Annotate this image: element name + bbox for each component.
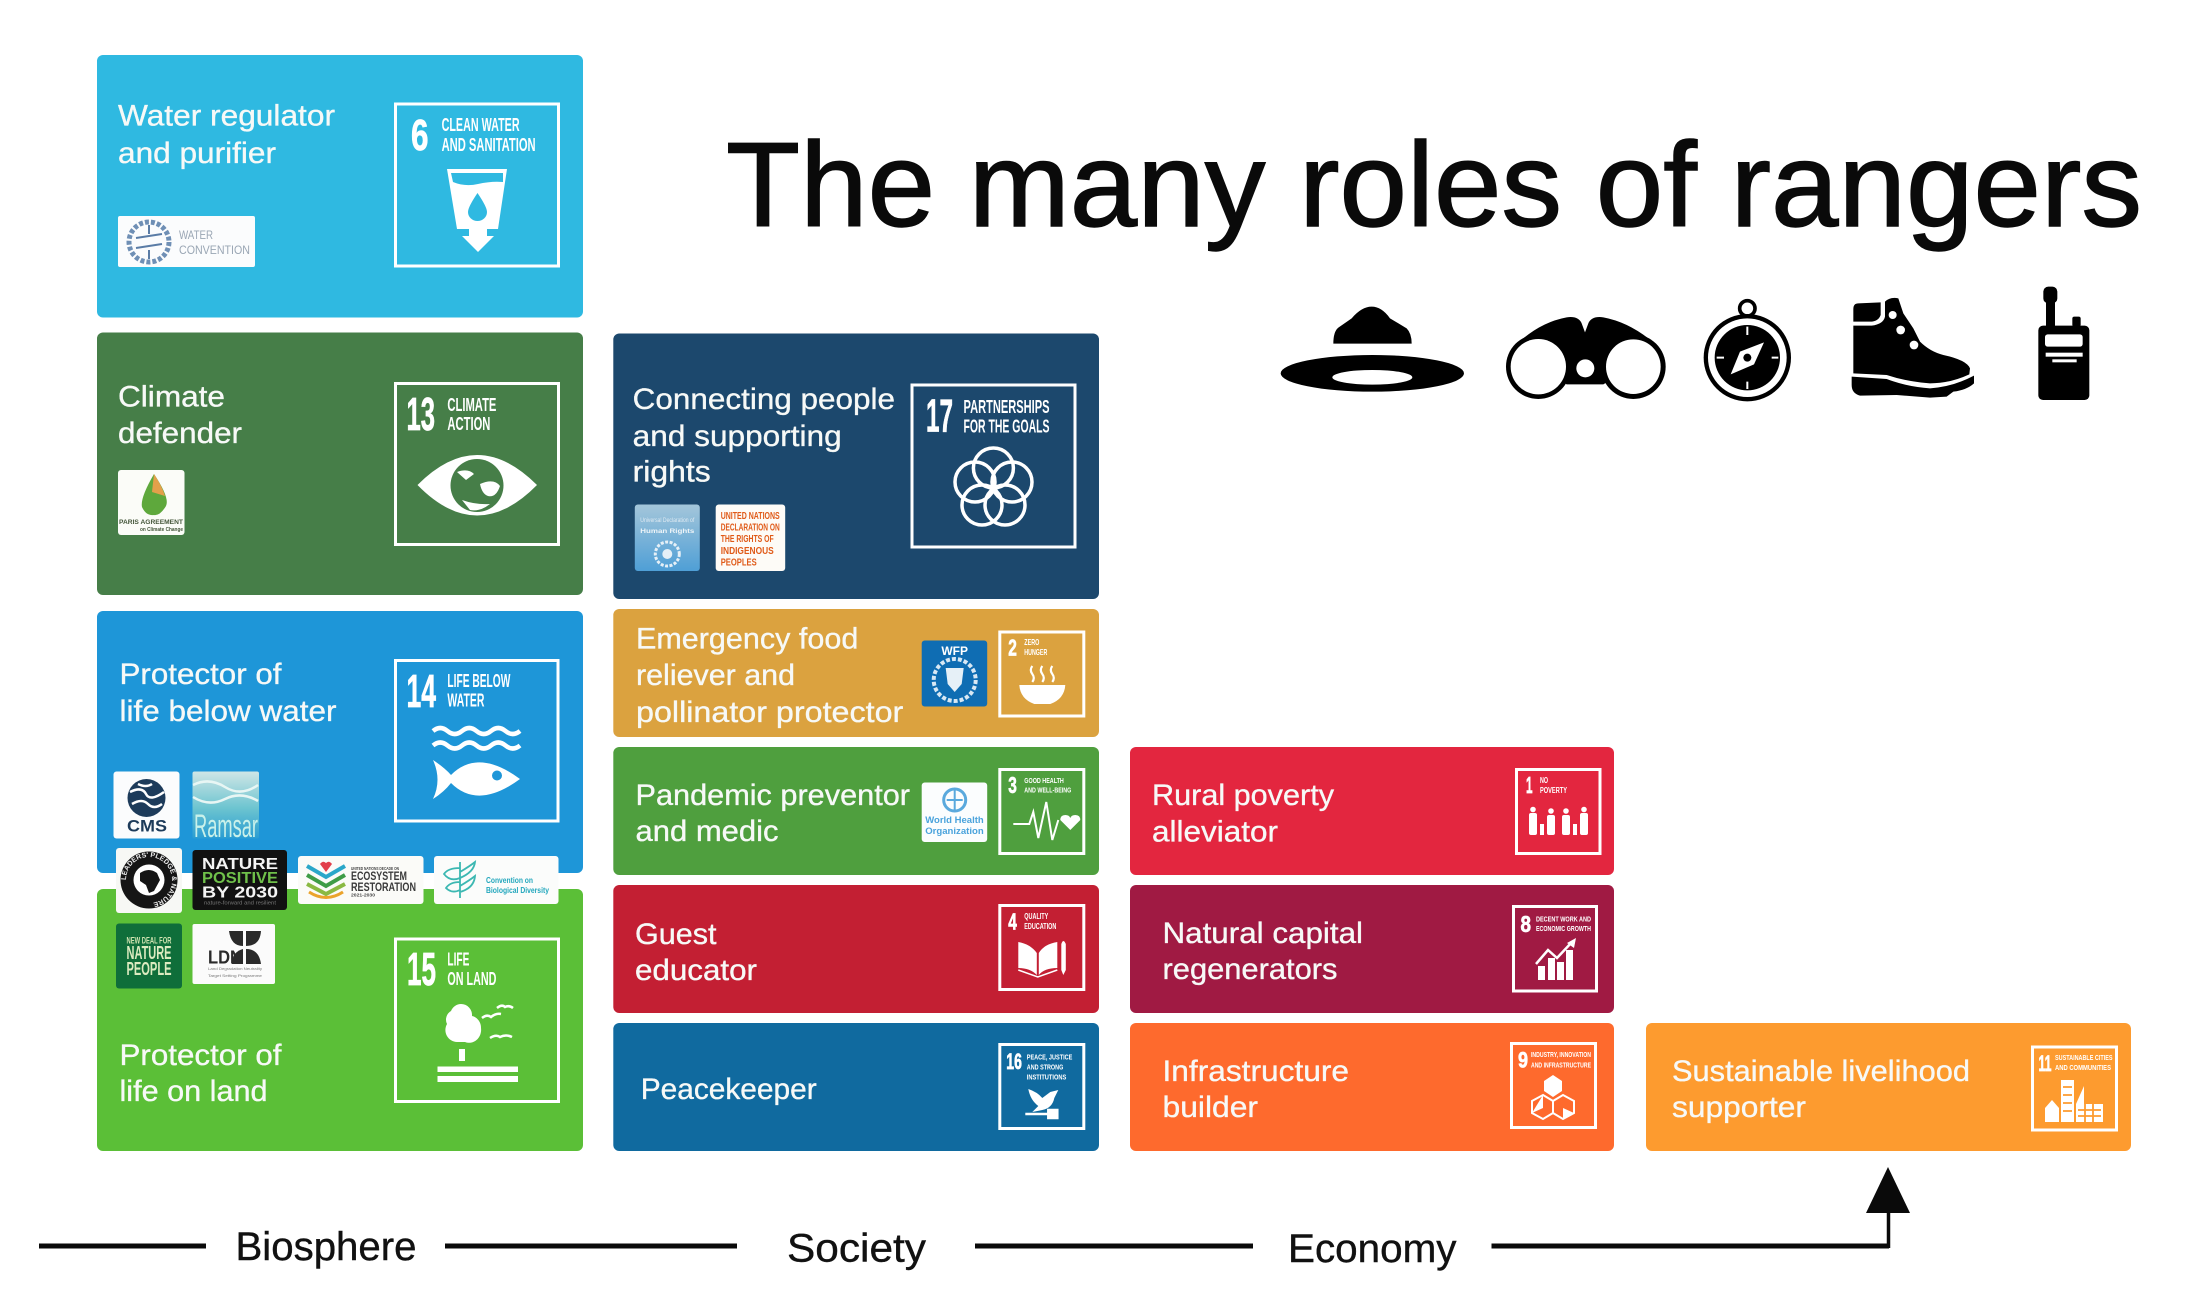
label: economy: Economy	[1288, 1227, 1456, 1271]
logo: ecosystem restoration: 2021-2030	[351, 892, 376, 898]
SDG 11 tile: AND COMMUNITIES	[2055, 1065, 2111, 1072]
role text: natural capital	[1162, 917, 1363, 986]
SDG 4 tile	[1000, 906, 1084, 990]
logo: universal declaration of human rights: Human Rights	[640, 528, 695, 535]
role text: pandemic preventor: and medic	[636, 815, 778, 848]
logo: water convention: CONVENTION	[179, 243, 250, 257]
role text: rural poverty	[1152, 779, 1334, 848]
SDG 3 tile	[1000, 770, 1084, 854]
SDG 14 tile: 14	[406, 665, 436, 717]
SDG 2 tile: HUNGER	[1024, 647, 1047, 657]
axis line segments	[39, 1244, 1889, 1248]
SDG 8 tile: 8	[1520, 911, 1531, 937]
SDG 15 tile: ON LAND	[447, 969, 496, 989]
panel: climate defender	[97, 332, 583, 595]
progression axis with arrow	[39, 1167, 1910, 1271]
SDG 16 tile: PEACE, JUSTICE	[1027, 1052, 1072, 1062]
ranger icons row	[1281, 287, 2089, 401]
logo: ecosystem restoration	[298, 856, 424, 904]
logo: new deal for nature and people	[116, 924, 182, 988]
role text: natural capital: Natural capital	[1162, 917, 1363, 950]
SDG 6 tile: 6	[411, 111, 428, 160]
SDG 15 tile	[396, 939, 558, 1102]
SDG 9 tile	[1512, 1044, 1596, 1128]
role text: sustainable livelihood: Sustainable livelihood	[1672, 1055, 1970, 1088]
SDG 14 tile: LIFE BELOW	[447, 671, 510, 691]
logo: LDN: Land Degradation Neutrality	[208, 966, 262, 971]
SDG 1 tile: POVERTY	[1540, 786, 1567, 795]
role text: pandemic preventor: Pandemic preventor	[636, 779, 910, 812]
panel: protector of life below water	[97, 611, 583, 873]
SDG 3 tile: AND WELL-BEING	[1024, 786, 1071, 794]
SDG 3 tile: 3	[1008, 772, 1017, 798]
logo: CMS	[114, 772, 180, 838]
role text: guest educator	[635, 918, 757, 987]
role text: life on land	[120, 1039, 282, 1108]
logo: ecosystem restoration: ECOSYSTEM	[351, 871, 407, 883]
logo: new deal for nature and people: PEOPLE	[126, 959, 172, 979]
SDG 14 tile: WATER	[447, 690, 484, 710]
role text: emergency food: reliever and	[636, 659, 795, 692]
role text: life below water: life below water	[120, 695, 337, 728]
logo: water convention	[118, 216, 255, 267]
SDG 16 tile: INSTITUTIONS	[1027, 1072, 1066, 1082]
logo: nature positive by 2030	[192, 850, 287, 910]
SDG 8 tile: DECENT WORK AND	[1536, 916, 1591, 924]
SDG 9 tile: INDUSTRY, INNOVATION	[1531, 1052, 1591, 1059]
role text: water regulator: Water regulator	[118, 100, 335, 132]
panel: connecting people	[613, 334, 1099, 599]
logo: LDN: Target Setting Programme	[208, 973, 263, 978]
label: society: Society	[787, 1226, 926, 1270]
SDG 17 tile: FOR THE GOALS	[964, 416, 1050, 436]
logo cluster: treaties and pledges	[114, 772, 558, 988]
role text: connecting people	[633, 383, 895, 488]
logo: ecosystem restoration: UNITED NATIONS DECADE ON	[351, 866, 399, 871]
logo: World Health Organization: World Health	[925, 815, 984, 826]
logo: universal declaration of human rights	[635, 504, 700, 571]
SDG 6 tile: CLEAN WATER	[442, 115, 520, 135]
role text: climate defender	[118, 380, 242, 450]
panel: emergency food reliever	[613, 609, 1099, 737]
panel: guest educator	[613, 885, 1099, 1013]
logo: declaration on the rights of indigenous peoples	[716, 504, 785, 571]
role text: life on land: Protector of	[120, 1039, 282, 1072]
role text: connecting people: and supporting	[633, 420, 842, 453]
role text: emergency food: pollinator protector	[636, 696, 903, 729]
logo: World Health Organization: Organization	[925, 826, 984, 837]
panel: pandemic preventor	[613, 747, 1099, 875]
SDG 1 tile: 1	[1526, 772, 1533, 798]
SDG 8 tile: ECONOMIC GROWTH	[1536, 926, 1591, 933]
label: biosphere: Biosphere	[236, 1225, 416, 1269]
logo: nature positive by 2030: nature-forward and resilient	[204, 900, 277, 906]
SDG 4 tile: 4	[1008, 908, 1017, 934]
SDG 6 tile: AND SANITATION	[442, 135, 536, 155]
logo: convention on biological diversity: Biological Diversity	[486, 886, 549, 895]
logo: convention on biological diversity: Convention on	[486, 876, 533, 885]
role text: infrastructure: Infrastructure	[1162, 1055, 1349, 1088]
logo: paris agreement	[118, 470, 184, 535]
SDG 9 tile: AND INFRASTRUCTURE	[1531, 1062, 1591, 1070]
SDG 13 tile: CLIMATE	[447, 395, 496, 415]
SDG 16 tile: 16	[1006, 1049, 1022, 1074]
SDG 11 tile: 11	[2038, 1051, 2052, 1076]
SDG 11 tile: SUSTAINABLE CITIES	[2055, 1055, 2113, 1062]
logo: Ramsar	[192, 772, 259, 844]
logo: convention on biological diversity	[434, 856, 558, 904]
icon: hiking boot	[1852, 298, 1974, 398]
logo: ecosystem restoration: RESTORATION	[351, 882, 416, 894]
logo: CMS: CMS	[127, 816, 167, 836]
SDG 15 tile: 15	[407, 943, 436, 995]
panel: protector of life on land	[97, 889, 583, 1151]
logo: nature positive by 2030: NATURE	[202, 856, 278, 873]
arrow up	[1866, 1167, 1910, 1248]
role text: guest educator: educator	[635, 954, 757, 987]
role text: water regulator	[118, 100, 335, 170]
role text: connecting people: Connecting people	[633, 383, 895, 416]
SDG 16 tile	[1000, 1044, 1084, 1128]
logo: declaration on the rights of indigenous peoples: UNITED NATIONS	[721, 510, 780, 522]
logo: water convention: WATER	[179, 228, 213, 242]
logo: WFP	[922, 640, 987, 706]
logo: nature positive by 2030: BY 2030	[202, 884, 278, 902]
icon: compass	[1704, 301, 1791, 401]
logo: Ramsar: Ramsar	[194, 808, 258, 844]
SDG 4 tile: EDUCATION	[1024, 921, 1056, 931]
role text: emergency food	[636, 622, 903, 729]
role text: connecting people: rights	[633, 456, 711, 488]
role text: life on land: life on land	[120, 1075, 268, 1108]
SDG 15 tile: LIFE	[447, 950, 469, 970]
SDG 1 tile: NO	[1540, 776, 1548, 785]
panel: rural poverty alleviator	[1130, 747, 1614, 875]
SDG 17 tile: PARTNERSHIPS	[964, 397, 1050, 417]
role text: peacekeeper: Peacekeeper	[641, 1073, 817, 1106]
SDG 16 tile: AND STRONG	[1027, 1062, 1063, 1072]
role text: pandemic preventor	[636, 779, 910, 848]
role text: water regulator: and purifier	[118, 137, 276, 170]
role text: sustainable livelihood	[1672, 1055, 1970, 1124]
panel: infrastructure builder	[1130, 1023, 1614, 1151]
panel: water regulator	[97, 55, 583, 318]
logo: LDN	[192, 924, 275, 984]
logo: paris agreement: PARIS AGREEMENT	[119, 520, 183, 526]
logo: universal declaration of human rights: Universal Declaration of	[640, 518, 695, 524]
role text: infrastructure: builder	[1162, 1091, 1258, 1124]
role text: rural poverty: alleviator	[1152, 816, 1278, 848]
SDG 1 tile	[1516, 770, 1600, 854]
SDG 2 tile	[1000, 632, 1084, 716]
logo: leaders pledge for nature: LEADERS' PLEDGE & NATURE	[121, 852, 177, 908]
icon: walkie-talkie radio	[2038, 287, 2089, 400]
logo: declaration on the rights of indigenous peoples: PEOPLES	[721, 556, 757, 568]
panel: sustainable livelihood supporter	[1646, 1023, 2131, 1151]
SDG 4 tile: QUALITY	[1024, 911, 1049, 921]
panel: peacekeeper	[613, 1023, 1099, 1151]
role text: guest educator: Guest	[635, 918, 717, 951]
SDG 2 tile: 2	[1008, 634, 1017, 660]
role text: climate defender: defender	[118, 417, 242, 450]
logo: LDN: LDN	[208, 948, 242, 968]
SDG 6 tile	[396, 104, 558, 266]
SDG 13 tile: 13	[406, 388, 435, 440]
role text: sustainable livelihood: supporter	[1672, 1091, 1806, 1124]
logo: WFP: WFP	[941, 644, 968, 658]
icon: ranger hat	[1281, 307, 1464, 392]
panel: natural capital regenerators	[1130, 885, 1614, 1013]
SDG 11 tile	[2032, 1047, 2116, 1130]
logo: paris agreement: on Climate Change	[140, 527, 183, 533]
role text: climate defender: Climate	[118, 380, 225, 414]
SDG 8 tile	[1514, 906, 1596, 991]
logo: nature positive by 2030: POSITIVE	[202, 870, 278, 887]
SDG 13 tile	[396, 384, 558, 544]
role text: infrastructure	[1162, 1055, 1349, 1124]
icon: binoculars	[1506, 317, 1666, 399]
logo: World Health Organization	[922, 782, 987, 842]
SDG 14 tile	[396, 660, 558, 821]
logo: new deal for nature and people: NEW DEAL FOR	[126, 936, 172, 946]
role text: emergency food: Emergency food	[636, 622, 858, 656]
logo: declaration on the rights of indigenous peoples: DECLARATION ON	[721, 522, 780, 534]
logo: new deal for nature and people: NATURE	[126, 943, 172, 963]
SDG 3 tile: GOOD HEALTH	[1024, 776, 1064, 785]
role text: life below water	[120, 658, 337, 728]
title: The many roles of rangers	[726, 118, 2142, 252]
role text: life below water: Protector of	[120, 658, 282, 691]
SDG 13 tile: ACTION	[447, 414, 490, 434]
logo: declaration on the rights of indigenous peoples: INDIGENOUS	[721, 545, 774, 557]
logo: declaration on the rights of indigenous peoples: THE RIGHTS OF	[721, 533, 774, 545]
SDG 2 tile: ZERO	[1024, 637, 1040, 647]
role text: natural capital: regenerators	[1162, 953, 1338, 986]
SDG 17 tile	[912, 385, 1075, 547]
role text: rural poverty: Rural poverty	[1152, 779, 1334, 812]
SDG 9 tile: 9	[1518, 1048, 1528, 1072]
SDG 17 tile: 17	[926, 390, 953, 442]
